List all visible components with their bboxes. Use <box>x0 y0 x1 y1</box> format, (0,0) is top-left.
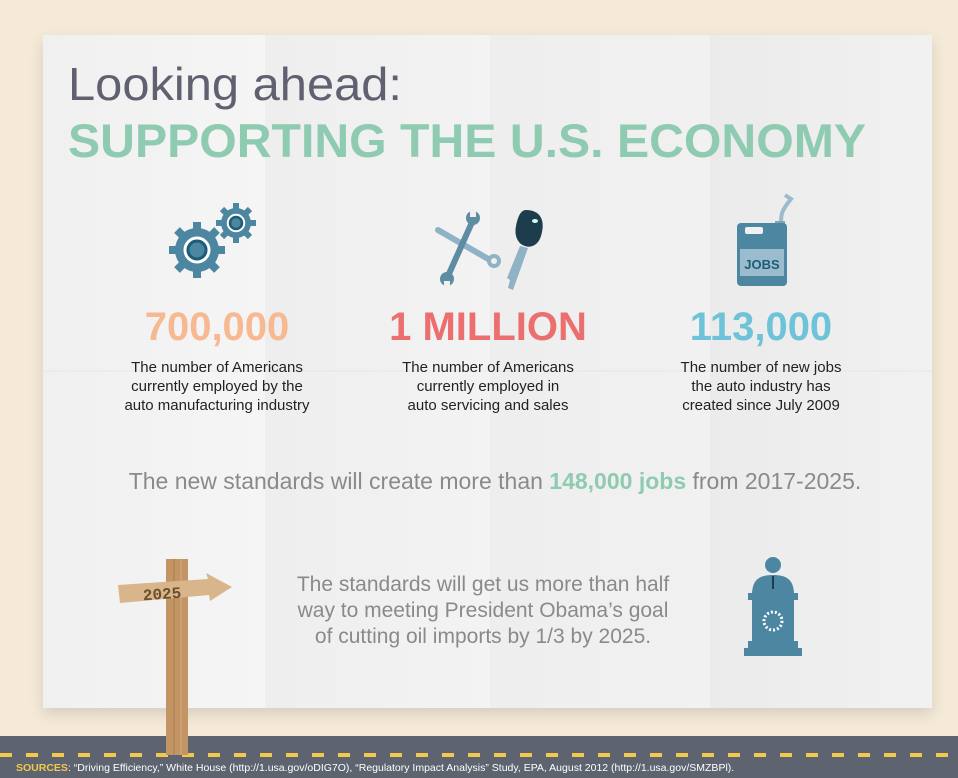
stat: 113,000: created since July 2009 <box>682 397 840 414</box>
icon: 2025 signpost: 2025 <box>142 585 182 605</box>
stat: 1 million <box>389 305 587 414</box>
stat: 1 million: auto servicing and sales <box>408 397 568 414</box>
stat: 113,000: the auto industry has <box>691 378 831 395</box>
icon: wrenches and key <box>435 210 543 290</box>
stat: 700,000: auto manufacturing industry <box>124 397 310 414</box>
title <box>68 58 866 167</box>
icon: jobs canister <box>737 194 794 286</box>
stat: 1 million: 1 MILLION <box>389 305 587 349</box>
stat: 113,000: The number of new jobs <box>681 359 841 376</box>
text: 148,000 jobs statement: The new standards will create more than 148,000 jobs from 2017-2025. <box>129 468 861 494</box>
stat: 1 million: The number of Americans <box>402 359 574 376</box>
stat: 113,000 <box>680 305 841 414</box>
sources: SOURCES: “Driving Efficiency,” White House (http://1.usa.gov/oDIG7O), “Regulatory Impact Analysis” Study, EPA, August 2012 (http://1.usa.gov/SMZBPl). <box>16 762 734 774</box>
stat: 700,000 <box>124 305 310 414</box>
text: oil imports goal: The standards will get us more than half <box>297 573 669 596</box>
road <box>0 736 958 778</box>
stat: 700,000: The number of Americans <box>131 359 303 376</box>
text: oil imports goal <box>297 573 670 648</box>
title: SUPPORTING THE U.S. ECONOMY <box>68 114 866 167</box>
stat: 113,000: 113,000 <box>690 305 832 349</box>
icon: 2025 signpost <box>118 559 232 755</box>
stat: 1 million: currently employed in <box>417 378 559 395</box>
text: oil imports goal: way to meeting President Obama’s goal <box>298 599 668 622</box>
icon: jobs canister: JOBS <box>744 257 780 272</box>
stat: 700,000: 700,000 <box>145 305 289 349</box>
icon: gears <box>169 203 256 278</box>
icon: president at podium <box>744 557 802 656</box>
title: Looking ahead: <box>68 58 402 110</box>
text: oil imports goal: of cutting oil imports by 1/3 by 2025. <box>315 625 651 648</box>
stat: 700,000: currently employed by the <box>131 378 303 395</box>
